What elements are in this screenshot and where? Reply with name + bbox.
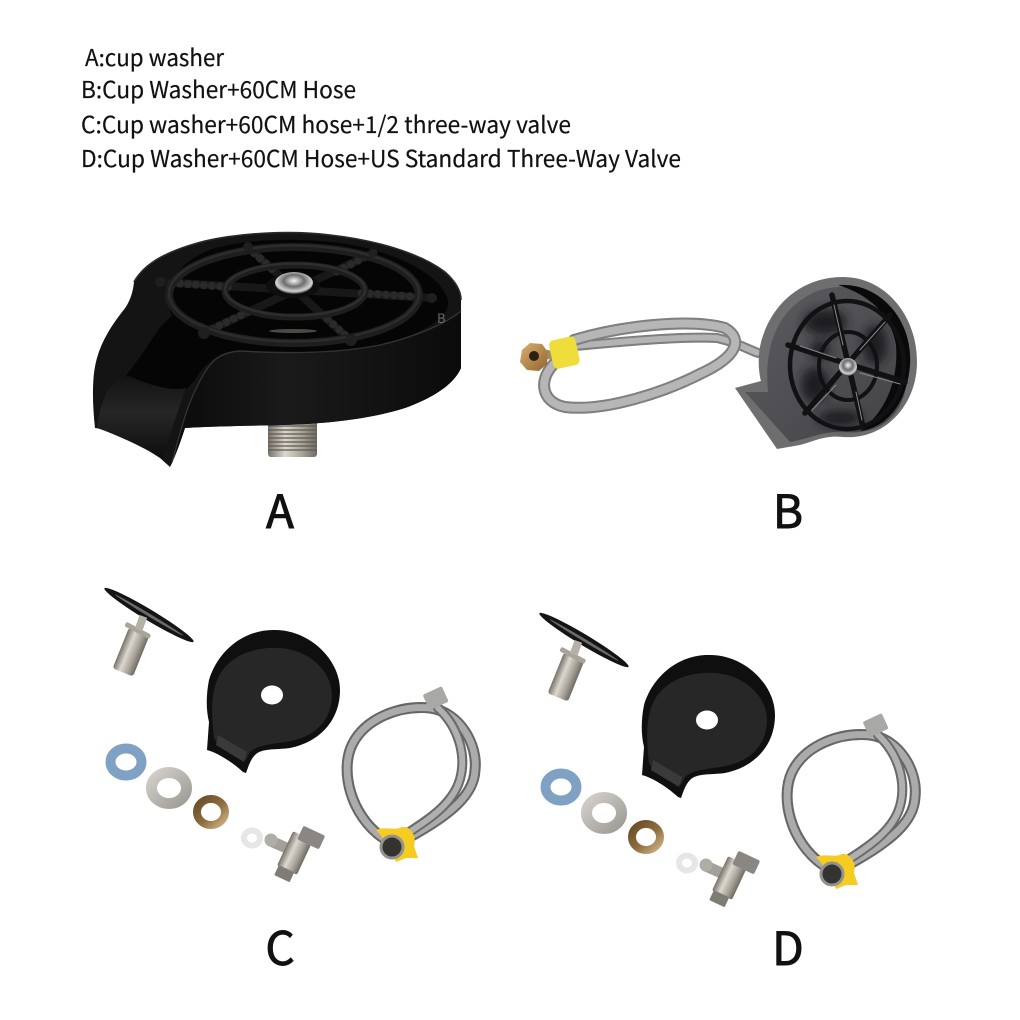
threaded connector — [268, 420, 317, 457]
chrome nozzle — [275, 272, 313, 294]
brass nut — [197, 799, 225, 825]
steel washer — [152, 772, 186, 804]
spokes — [788, 295, 905, 427]
inner ring — [819, 332, 877, 400]
shadows in basin — [801, 309, 887, 426]
tiny B mark: B — [437, 308, 446, 327]
cup base — [207, 630, 340, 773]
cup hole — [696, 710, 718, 730]
hub — [266, 274, 320, 298]
option B text: B:Cup Washer+60CM Hose — [81, 71, 356, 105]
spokes — [159, 247, 433, 340]
cup floor — [212, 648, 332, 760]
cup hole — [261, 686, 283, 704]
three-way valve — [700, 851, 760, 907]
blue washer — [546, 774, 576, 800]
product A label: A — [266, 476, 294, 542]
brass nut — [520, 343, 548, 371]
brass nut — [632, 824, 660, 850]
hose top nut — [863, 713, 889, 737]
rim highlight — [134, 233, 461, 300]
washer body — [735, 277, 917, 449]
blue washer — [110, 748, 142, 776]
yellow clip — [548, 336, 581, 370]
three-way valve — [264, 826, 325, 882]
product C label: C — [265, 913, 295, 979]
inner ring highlight — [225, 264, 365, 316]
steel washer — [586, 798, 622, 828]
nozzle stem — [113, 615, 151, 677]
connector stub — [545, 354, 560, 357]
dark inner crescent — [838, 285, 910, 431]
wheel grate — [788, 295, 905, 429]
washer body — [93, 233, 461, 467]
steel hose — [347, 708, 475, 838]
spoke end knobs — [155, 242, 437, 346]
wheel grate — [159, 246, 433, 343]
option D text: D:Cup Washer+60CM Hose+US Standard Three-Way Valve — [81, 140, 681, 174]
nozzle stem — [548, 640, 586, 702]
hose end fitting — [381, 836, 403, 858]
yellow clip — [376, 827, 418, 862]
front wall — [170, 312, 461, 467]
outer ring highlight — [169, 246, 419, 342]
wheel side view — [537, 609, 631, 671]
lower nozzle glimpse — [269, 329, 317, 333]
product D label: D — [772, 913, 804, 979]
spoke beads — [172, 253, 420, 335]
hose end fitting — [821, 863, 843, 885]
product B label: B — [773, 476, 803, 542]
cup base — [642, 655, 775, 798]
product D: parts kit with US valve — [537, 609, 915, 907]
white gasket — [244, 830, 260, 846]
product A: assembled cup washer — [93, 233, 461, 467]
option C text: C:Cup washer+60CM hose+1/2 three-way valve — [81, 106, 571, 140]
outer ring — [790, 301, 904, 429]
product B: washer with hose — [520, 277, 917, 449]
cup floor — [647, 673, 767, 785]
steel hose — [787, 735, 915, 865]
front wall top edge — [172, 311, 461, 462]
cup spout channel — [651, 760, 682, 787]
product C: parts kit — [102, 584, 475, 882]
yellow clip — [816, 854, 858, 889]
option A text: A:cup washer — [85, 39, 224, 73]
chrome ball — [839, 358, 857, 376]
top surface — [112, 240, 448, 408]
cup spout channel — [216, 735, 247, 762]
hose — [544, 324, 758, 408]
basin — [745, 287, 908, 442]
nut bore — [529, 351, 539, 361]
hose top nut — [423, 686, 449, 710]
inner ring — [225, 265, 365, 317]
outer ring — [169, 247, 419, 343]
white gasket — [679, 856, 695, 870]
title list of options — [81, 39, 681, 174]
wheel side view — [102, 584, 196, 646]
wheel highlights — [800, 305, 900, 420]
spout channel — [97, 376, 186, 458]
